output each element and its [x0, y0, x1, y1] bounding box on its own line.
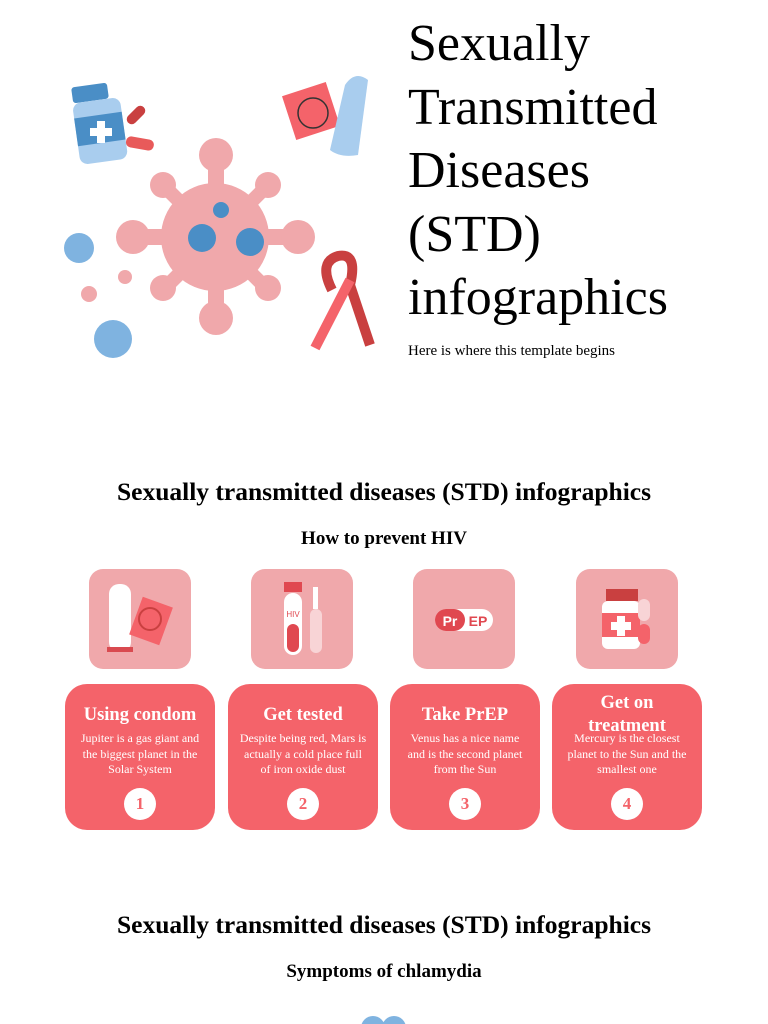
card 2: get tested: 2 — [299, 794, 307, 813]
icon: partial blue shape — [362, 1016, 406, 1024]
icon box: test — [251, 569, 353, 669]
icon: pill bottle — [71, 83, 155, 165]
title: Sexually Transmitted Diseases (STD) infographics — [408, 15, 668, 326]
icon: awareness ribbon — [315, 256, 370, 348]
icon box: PrEP: Pr — [443, 613, 458, 629]
card 3: take PrEP: 3 — [461, 794, 469, 813]
card 4: treatment — [552, 684, 702, 830]
subheading: symptoms: Symptoms of chlamydia — [286, 961, 482, 982]
card 4: treatment: Get on treatment — [588, 693, 666, 736]
card 1: using condom — [65, 684, 215, 830]
section heading 1: Sexually transmitted diseases (STD) infographics — [117, 477, 651, 506]
icon box: PrEP: EP — [469, 613, 487, 629]
icon: virus — [81, 138, 315, 335]
card 2: get tested: Get tested — [263, 705, 343, 725]
icon: condom pack — [282, 76, 368, 156]
icon box: condom — [89, 569, 191, 669]
icon box: PrEP — [413, 569, 515, 669]
subheading: how to prevent HIV: How to prevent HIV — [301, 528, 467, 549]
card 4: treatment: Mercury is the closest planet to the Sun and the smallest one — [568, 731, 686, 776]
hero illustration — [64, 76, 375, 358]
icon box: test: HIV — [286, 610, 300, 619]
card 3: take PrEP: Venus has a nice name and is the second planet from the Sun — [408, 731, 522, 776]
card 2: get tested — [228, 684, 378, 830]
section heading 2: Sexually transmitted diseases (STD) infographics — [117, 910, 651, 939]
card 1: using condom: Jupiter is a gas giant and the biggest planet in the Solar System — [81, 731, 199, 776]
icon box: medicine — [576, 569, 678, 669]
card 1: using condom: 1 — [136, 794, 144, 813]
subtitle: Here is where this template begins — [408, 343, 615, 359]
card 4: treatment: 4 — [623, 794, 631, 813]
card 3: take PrEP — [390, 684, 540, 830]
card 3: take PrEP: Take PrEP — [422, 705, 508, 725]
card 2: get tested: Despite being red, Mars is actually a cold place full of iron oxide dust — [240, 731, 366, 776]
card 1: using condom: Using condom — [84, 705, 196, 725]
